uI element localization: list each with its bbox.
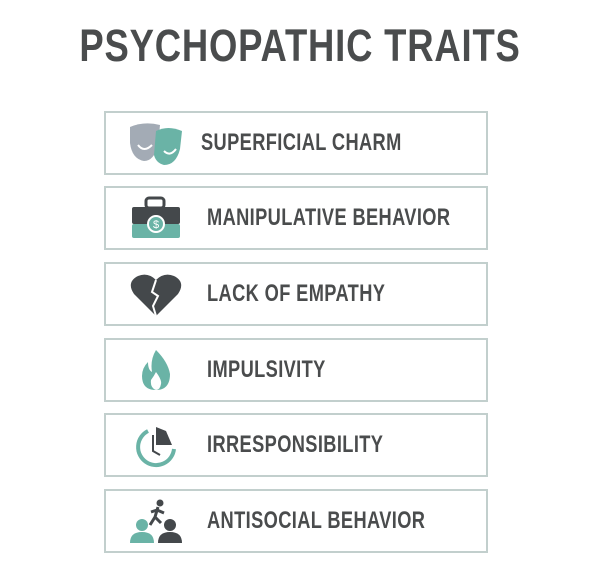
panel: impulsivity [104,338,488,402]
panel: manipulative behavior [104,186,488,250]
icon: broken heart [130,274,182,316]
panel: irresponsibility [104,413,488,477]
title: PSYCHOPATHIC TRAITS [79,20,521,71]
label: ANTISOCIAL BEHAVIOR [207,507,425,534]
label: IMPULSIVITY [207,356,326,383]
panel: lack of empathy [104,262,488,326]
panel: superficial charm [104,111,488,175]
label: LACK OF EMPATHY [207,280,385,307]
label: SUPERFICIAL CHARM [201,129,402,156]
label: IRRESPONSIBILITY [207,431,383,458]
icon: flame [142,350,170,390]
panel: antisocial behavior [104,489,488,553]
icon: briefcase: $ [153,219,159,231]
label: MANIPULATIVE BEHAVIOR [207,204,450,231]
icon: masks [130,123,182,165]
icon: briefcase [132,196,180,238]
icon: clock [136,427,176,468]
icon: people [130,500,182,543]
